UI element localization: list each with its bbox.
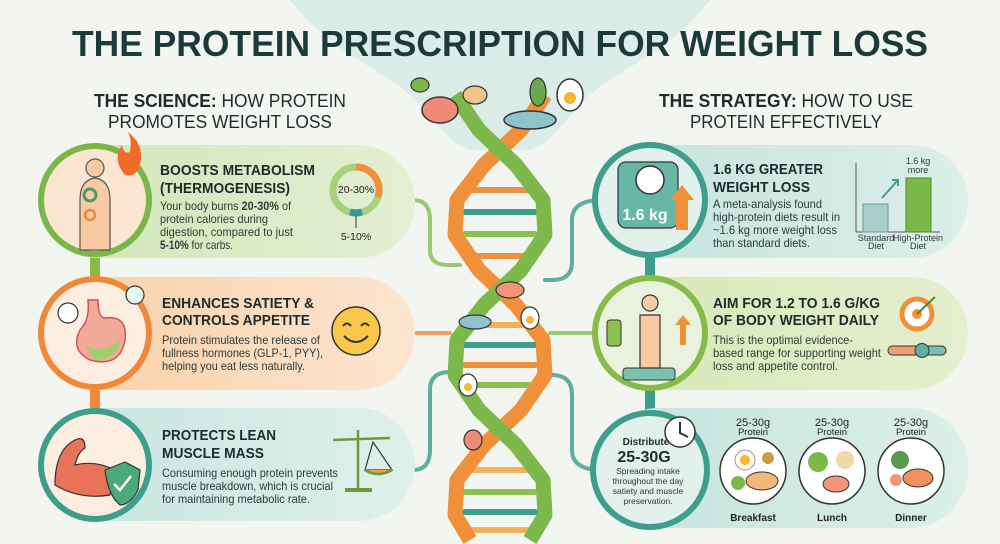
chart: bar comparison — [856, 156, 943, 251]
DNA helix — [411, 78, 583, 540]
heading: strategy — [659, 90, 913, 132]
panel: boosts metabolism — [40, 132, 415, 258]
panel: lean muscle: Consuming enough protein prevents — [162, 466, 338, 480]
background funnel — [290, 0, 710, 150]
panel: lean muscle: MUSCLE MASS — [162, 445, 264, 462]
chart: donut: 20-30% — [338, 184, 374, 196]
plate: dinner: Protein — [896, 427, 926, 438]
chart: bar comparison: Standard — [858, 233, 894, 243]
food: cashew — [463, 86, 487, 104]
chart: donut — [333, 167, 379, 243]
icon: distribute circle: Distribute — [623, 437, 670, 448]
plate: dinner: Dinner — [895, 513, 927, 524]
icon: scale 1.6kg — [595, 145, 705, 255]
chart: donut: 5-10% — [341, 231, 371, 243]
heading: science — [94, 90, 346, 132]
icon: distribute circle: satiety and muscle — [613, 486, 683, 496]
food: egg — [557, 79, 583, 111]
panel: boosts metabolism: 5-10% for carbs. — [160, 238, 233, 252]
chart: bar comparison: Diet — [868, 241, 884, 251]
panel: satiety: Protein stimulates the release of — [162, 333, 321, 347]
panel: lean muscle: for maintaining metabolic rate. — [162, 492, 310, 506]
panel: 1.2 to 1.6 g/kg: loss and appetite control. — [713, 359, 838, 373]
panel: boosts metabolism: Your body burns 20-30% of — [160, 199, 292, 213]
icon: stomach — [41, 279, 149, 387]
plate: lunch: Lunch — [817, 513, 847, 524]
icon: distribute circle: preservation. — [623, 496, 673, 506]
panel: lean muscle — [40, 408, 415, 521]
plate: breakfast: 25-30g — [736, 417, 770, 429]
chart: bar comparison: Diet — [910, 241, 926, 251]
icon: distribute circle — [593, 413, 707, 527]
icon: scales — [333, 430, 392, 490]
panel: 1.6 kg — [595, 145, 968, 258]
panel: 1.6 kg: ~1.6 kg more weight loss — [713, 223, 837, 237]
food: drumstick — [464, 430, 482, 450]
heading: strategy: THE STRATEGY: HOW TO USE — [659, 90, 913, 111]
panel: 1.6 kg: high-protein diets result in — [713, 210, 840, 224]
heading: science: THE SCIENCE: HOW PROTEIN — [94, 90, 346, 111]
panel: 1.6 kg: 1.6 KG GREATER — [713, 161, 823, 178]
food: salmon — [496, 282, 524, 298]
panel: 1.6 kg: than standard diets. — [713, 236, 810, 250]
panel: 1.2 to 1.6 g/kg: This is the optimal evidence- — [713, 333, 853, 347]
panel: 1.2 to 1.6 g/kg — [595, 277, 968, 390]
icon: muscle arm — [41, 411, 149, 519]
icon: slider — [888, 344, 946, 358]
heading: science: PROMOTES WEIGHT LOSS — [108, 111, 332, 132]
panel: satiety: ENHANCES SATIETY & — [162, 295, 314, 312]
panel: 1.2 to 1.6 g/kg: OF BODY WEIGHT DAILY — [713, 312, 879, 329]
panel: satiety: CONTROLS APPETITE — [162, 312, 310, 329]
icon: person on scale — [595, 278, 705, 388]
plate: dinner: 25-30g — [894, 417, 928, 429]
icon: scale 1.6kg: 1.6 kg — [622, 207, 668, 224]
plate: dinner — [878, 417, 944, 524]
panel: satiety: helping you eat less naturally. — [162, 359, 305, 373]
plate: lunch — [799, 417, 865, 524]
plate: breakfast: Protein — [738, 427, 768, 438]
panel: boosts metabolism: protein calories during — [160, 212, 268, 226]
icon: target — [902, 297, 935, 329]
plate: breakfast — [720, 417, 786, 524]
connectors — [95, 200, 650, 470]
panel: 1.2 to 1.6 g/kg: AIM FOR 1.2 TO 1.6 G/KG — [713, 295, 880, 312]
panel: boosts metabolism: digestion, compared to just — [160, 225, 294, 239]
panel: boosts metabolism: (THERMOGENESIS) — [160, 180, 290, 197]
plate: breakfast: Breakfast — [730, 513, 776, 524]
panel: boosts metabolism: BOOSTS METABOLISM — [160, 162, 315, 179]
heading: strategy: PROTEIN EFFECTIVELY — [690, 111, 882, 132]
panel: 1.6 kg: A meta-analysis found — [713, 197, 822, 211]
plate: lunch: Protein — [817, 427, 847, 438]
panel: 1.2 to 1.6 g/kg: based range for supporting weight — [713, 346, 882, 360]
panel: satiety — [40, 277, 415, 390]
chart: bar comparison: more — [908, 165, 928, 175]
food: egg3 — [459, 374, 477, 396]
icon: distribute circle: Spreading intake — [616, 466, 680, 476]
icon: smiley — [332, 307, 380, 355]
icon: body metabolism — [41, 132, 149, 254]
food: leaf — [530, 78, 546, 106]
food: fish2 — [459, 315, 491, 329]
title: THE PROTEIN PRESCRIPTION FOR WEIGHT LOSS — [72, 23, 928, 64]
plate: lunch: 25-30g — [815, 417, 849, 429]
chart: bar comparison: High-Protein — [893, 233, 943, 243]
panel: distribute — [593, 408, 968, 528]
food: steak — [422, 97, 458, 123]
panel: 1.6 kg: WEIGHT LOSS — [713, 179, 810, 196]
panel: lean muscle: muscle breakdown, which is crucial — [162, 479, 333, 493]
icon: distribute circle: throughout the day — [613, 476, 684, 486]
food: fish — [504, 111, 556, 129]
icon: distribute circle: 25-30G — [617, 449, 671, 466]
panel: satiety: fullness hormones (GLP-1, PYY), — [162, 346, 323, 360]
panel: lean muscle: PROTECTS LEAN — [162, 427, 276, 444]
food: egg2 — [521, 307, 539, 329]
chart: bar comparison: 1.6 kg — [906, 156, 930, 166]
food: beans — [411, 78, 429, 92]
